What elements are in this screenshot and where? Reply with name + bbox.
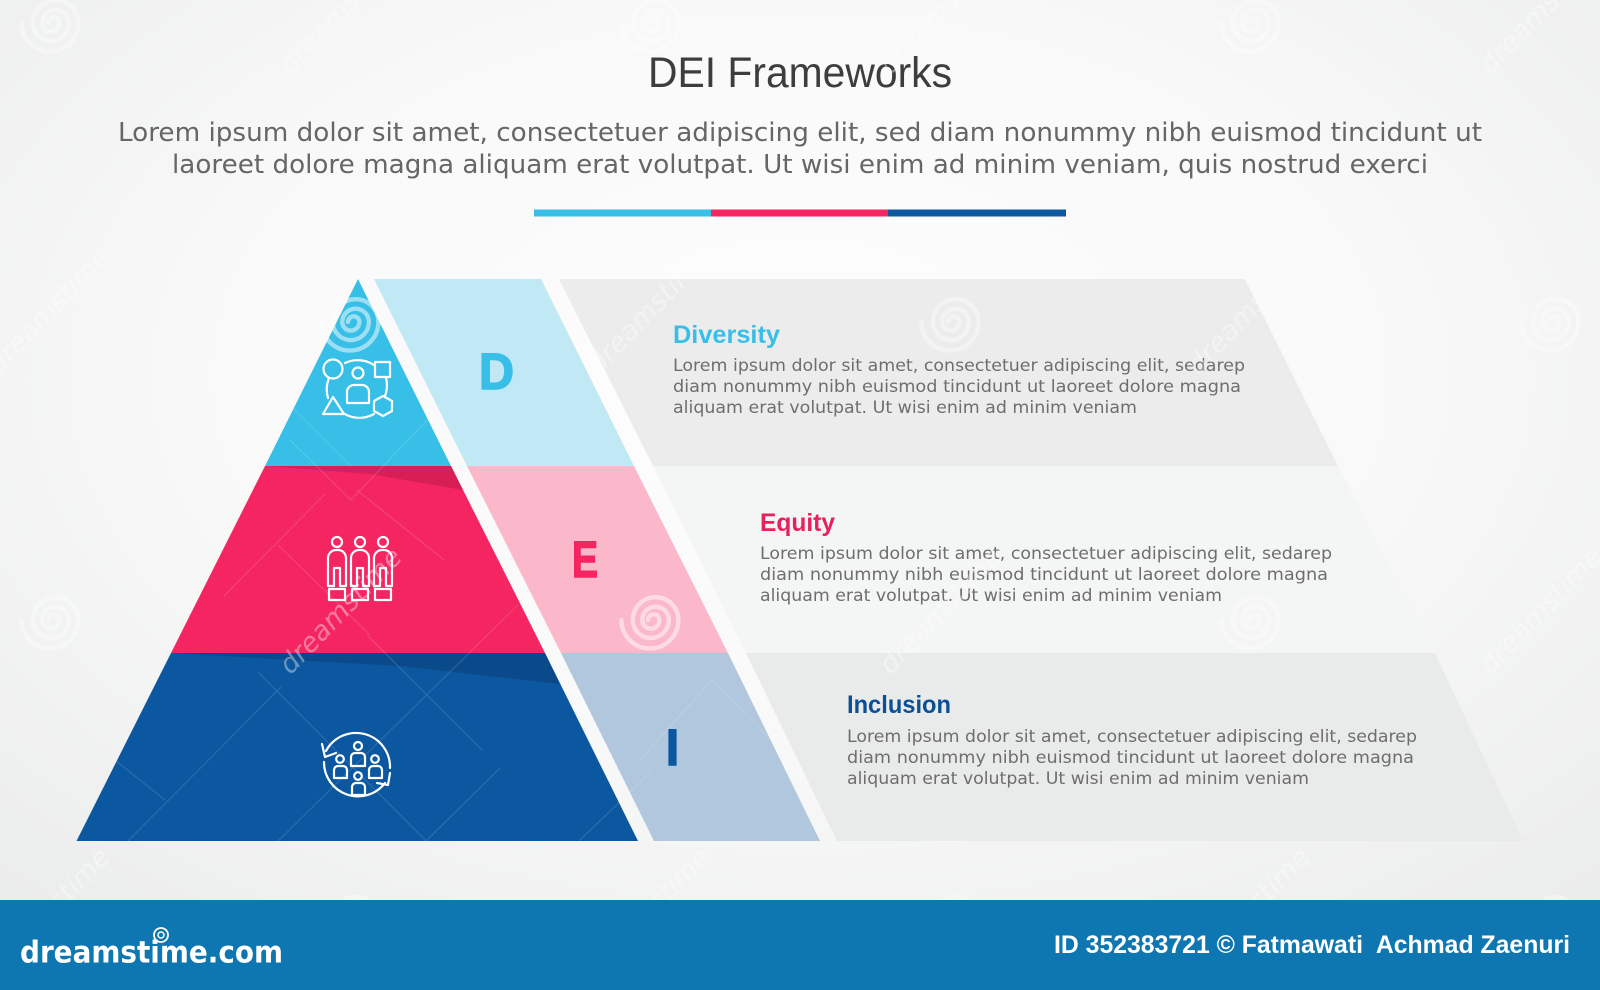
title: DEI Frameworks — [648, 49, 952, 97]
text block: diversity — [673, 321, 1245, 417]
tier shadow: inclusion — [171, 653, 560, 684]
footer logo: dreamstime.com — [20, 936, 283, 970]
text block: equity: Equity — [760, 509, 835, 537]
text block: diversity: Diversity — [673, 321, 780, 349]
icon: circular arrows around group — [322, 733, 390, 796]
watermark overlay: dreamstime — [873, 542, 1009, 680]
icon: three people on boxes — [328, 537, 392, 600]
text block: inclusion: Inclusion — [847, 691, 951, 719]
text block: diversity: aliquam erat volutpat. Ut wisi enim ad minim veniam — [673, 398, 1137, 417]
pyramid tier: equity — [171, 466, 545, 653]
footer bar — [0, 900, 1600, 990]
pyramid tier: inclusion — [76, 653, 638, 841]
text block: diversity: diam nonummy nibh euismod tincidunt ut laoreet dolore magna — [673, 377, 1241, 396]
text block: diversity: Lorem ipsum dolor sit amet, consectetuer adipiscing elit, sedarep — [673, 356, 1245, 375]
watermark overlay: dreamstime — [273, 542, 409, 680]
text block: inclusion: aliquam erat volutpat. Ut wisi enim ad minim veniam — [847, 769, 1309, 788]
subtitle text block: Lorem ipsum dolor sit amet, consectetuer adipiscing elit, sed diam nonummy nibh euismod tincidunt ut — [118, 118, 1482, 148]
text block: inclusion: diam nonummy nibh euismod tincidunt ut laoreet dolore magna — [847, 748, 1414, 767]
watermark overlay: dreamstime — [581, 242, 717, 380]
letter D: D — [479, 343, 514, 400]
watermark overlay: dreamstime — [1181, 842, 1317, 980]
text block: equity: diam nonummy nibh euismod tincidunt ut laoreet dolore magna — [760, 565, 1328, 584]
footer credit: ID 352383721 © Fatmawati Achmad Zaenuri — [1054, 931, 1570, 959]
text block: equity: aliquam erat volutpat. Ut wisi enim ad minim veniam — [760, 586, 1222, 605]
letter E: E — [572, 531, 598, 588]
icon: diversity shapes around person — [323, 360, 392, 418]
text block: equity — [760, 509, 1332, 605]
letter I: I — [666, 719, 679, 776]
pyramid — [76, 279, 638, 841]
panel: grey text backgrounds — [559, 279, 1523, 841]
panel: letter strip — [374, 279, 820, 841]
subtitle text block: laoreet dolore magna aliquam erat volutpat. Ut wisi enim ad minim veniam, quis nostrud exerci — [172, 150, 1428, 180]
text block: inclusion: Lorem ipsum dolor sit amet, consectetuer adipiscing elit, sedarep — [847, 727, 1417, 746]
text block: inclusion — [847, 691, 1417, 788]
text block: equity: Lorem ipsum dolor sit amet, consectetuer adipiscing elit, sedarep — [760, 544, 1332, 563]
pyramid tier: diversity — [265, 279, 451, 466]
subtitle text block — [118, 118, 1482, 180]
tricolor divider — [534, 210, 1066, 216]
tier shadow: equity — [265, 466, 463, 490]
watermark overlay: dreamstime — [1181, 242, 1317, 380]
watermark overlay: dreamstime — [581, 842, 717, 980]
